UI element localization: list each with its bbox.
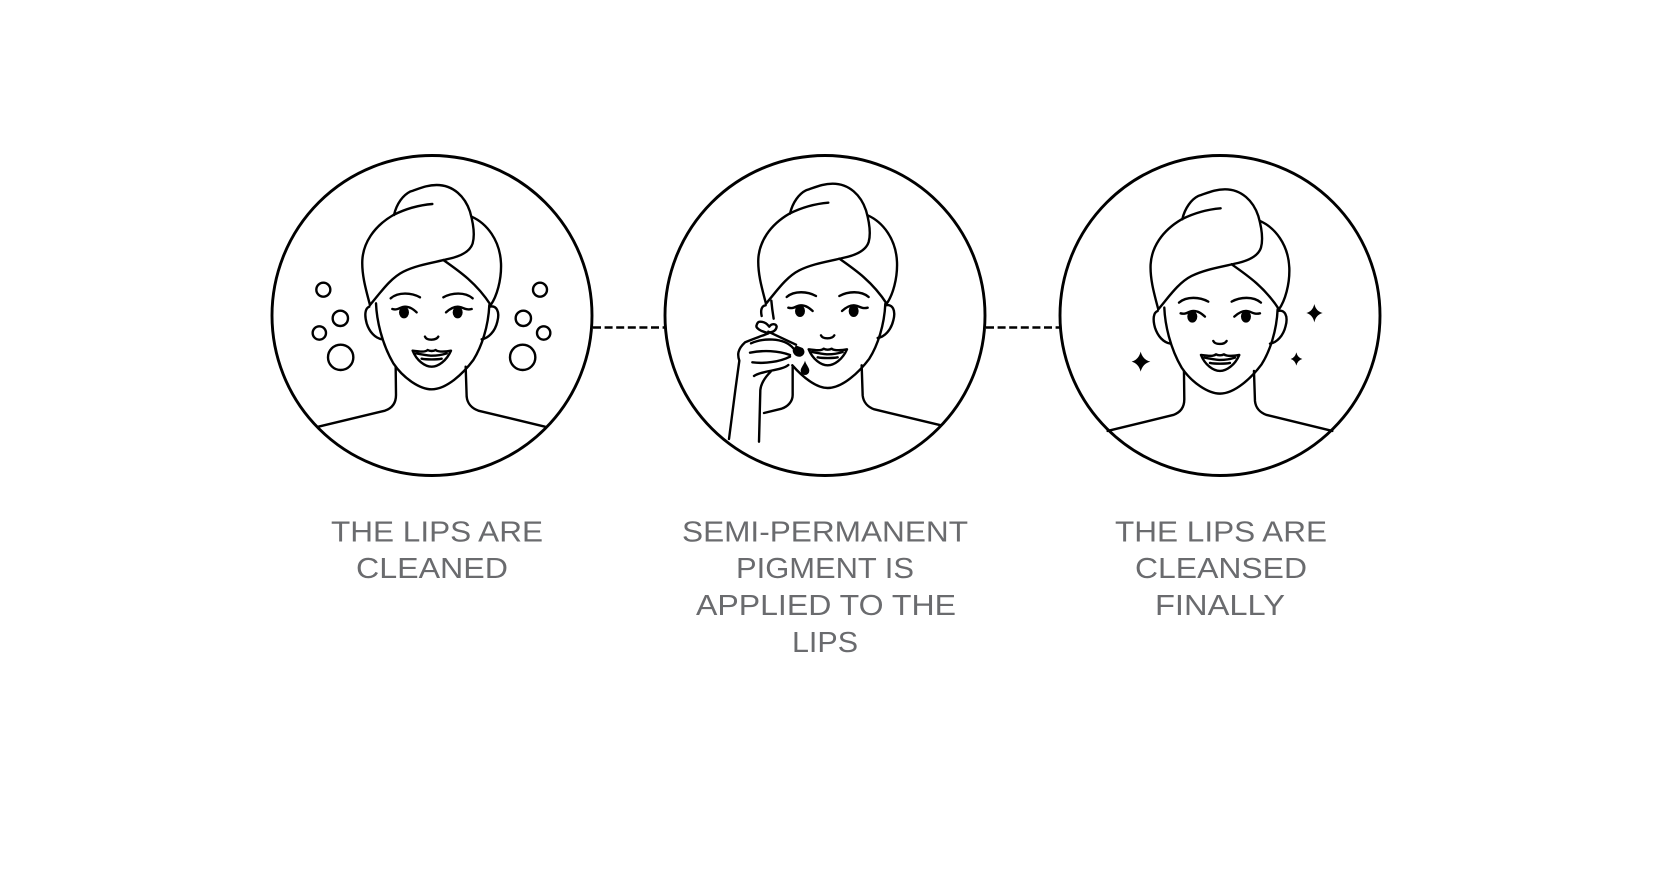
caption 2: PIGMENT IS (736, 553, 914, 585)
dashed connector: step 1 to 2 (593, 326, 665, 329)
caption 3: CLEANSED (1135, 553, 1307, 585)
circle frame 2 (665, 156, 985, 476)
caption 3: FINALLY (1155, 590, 1285, 622)
pigment droplet (801, 361, 809, 375)
icon: woman with towel and sparkles (1108, 189, 1332, 431)
panel: step 2 pigment applied (665, 156, 985, 659)
hand holding applicator (729, 322, 804, 442)
caption 3: THE LIPS ARE (1115, 516, 1327, 548)
panel: step 1 cleaned (272, 156, 592, 585)
panel: step 3 cleansed finally (1060, 156, 1380, 622)
icon: woman applying pigment by hand (729, 184, 941, 442)
dashed connector: step 2 to 3 (986, 326, 1060, 329)
caption 2: LIPS (792, 627, 858, 659)
icon: woman with towel and bubbles (313, 185, 550, 427)
caption 1: THE LIPS ARE (331, 516, 543, 548)
icon: sparkles (1132, 304, 1323, 372)
caption 2: APPLIED TO THE (696, 590, 956, 622)
circle frame 3 (1060, 156, 1380, 476)
bubbles (313, 283, 550, 370)
caption 2: SEMI-PERMANENT (682, 516, 968, 548)
caption 1: CLEANED (356, 553, 508, 585)
circle frame 1 (272, 156, 592, 476)
